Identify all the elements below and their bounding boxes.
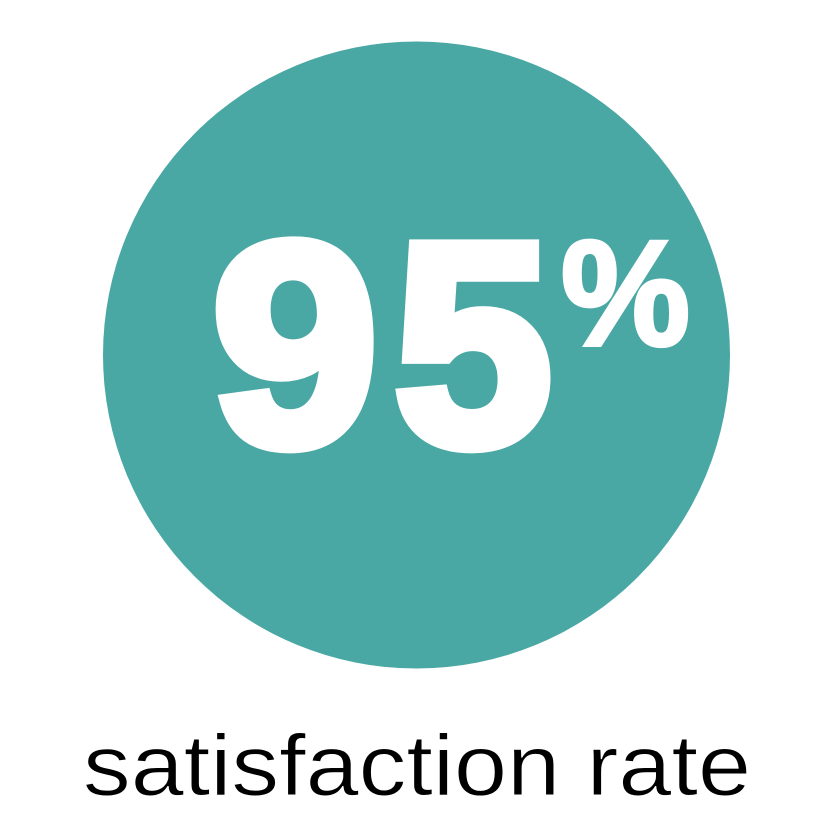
percent sign: % xyxy=(561,209,690,377)
teal circle xyxy=(103,42,730,668)
caption: satisfaction rate xyxy=(83,718,751,814)
digit 9: 9 xyxy=(212,184,378,506)
statistic: 95 xyxy=(212,184,552,506)
digit 5: 5 xyxy=(394,184,552,506)
